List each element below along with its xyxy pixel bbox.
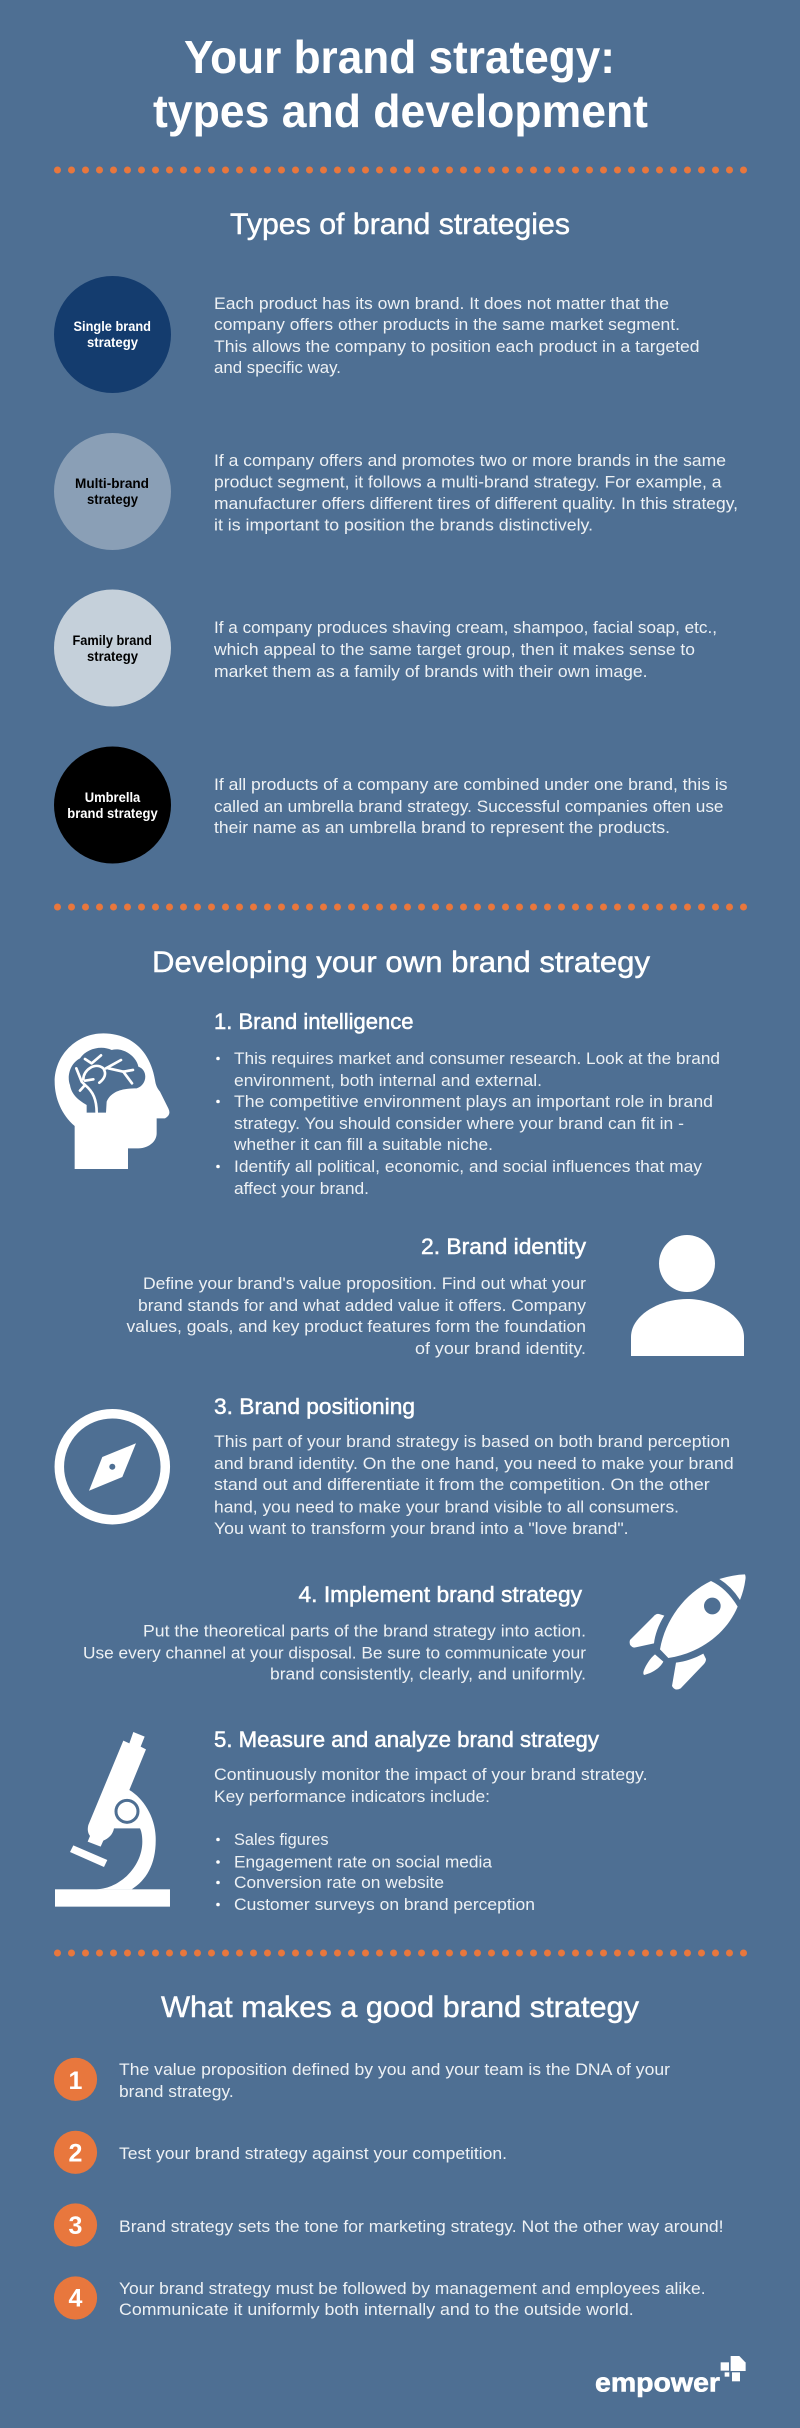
logo: empower xyxy=(595,2356,746,2398)
text: brand positioning description: stand out and differentiate it from the competition. On the other xyxy=(214,1475,710,1494)
panel: step 2 brand identity xyxy=(126,1234,744,1358)
list: brand intelligence points: strategy. You should consider where your brand can fit in - xyxy=(234,1114,684,1133)
badge: umbrella brand strategy: Umbrella xyxy=(85,790,141,805)
text: brand identity description xyxy=(126,1274,587,1358)
text: brand positioning description: and brand identity. On the one hand, you need to make your brand xyxy=(214,1454,734,1473)
number badge 2 xyxy=(54,2131,97,2174)
text: item 1: The value proposition defined by you and your team is the DNA of your xyxy=(119,2060,670,2079)
list: brand intelligence points: The competitive environment plays an important role in brand xyxy=(234,1092,713,1111)
text: umbrella brand description xyxy=(214,775,728,837)
icon: microscope xyxy=(55,1732,170,1907)
text: item 1 xyxy=(119,2060,670,2101)
list: brand intelligence points: whether it can fill a suitable niche. xyxy=(233,1135,493,1154)
heading: 4. implement brand strategy: 4. Implement brand strategy xyxy=(298,1582,582,1607)
item 1 xyxy=(54,2058,670,2101)
text: brand positioning description xyxy=(214,1432,734,1538)
text: brand positioning description: You want to transform your brand into a "love brand". xyxy=(214,1519,629,1538)
title: types and development xyxy=(153,85,648,137)
text: brand positioning description: This part of your brand strategy is based on both brand perception xyxy=(214,1432,730,1451)
text: implement description xyxy=(83,1621,586,1683)
badge: family brand strategy: Family brand xyxy=(72,633,152,648)
number badge 1: 1 xyxy=(69,2067,83,2095)
badge: single brand strategy: strategy xyxy=(87,335,138,350)
text: multi-brand description: product segment, it follows a multi-brand strategy. For example, a xyxy=(214,472,722,492)
text: measure intro: Key performance indicators include: xyxy=(214,1787,490,1806)
text: item 1: brand strategy. xyxy=(119,2082,234,2101)
list: brand intelligence points: Identify all political, economic, and social influences that may xyxy=(234,1157,703,1176)
text: implement description: Use every channel at your disposal. Be sure to communicate your xyxy=(83,1644,586,1663)
list: key performance indicators: Sales figures xyxy=(234,1830,329,1849)
text: family brand description xyxy=(213,618,717,681)
text: item 4: Your brand strategy must be followed by management and employees alike. xyxy=(119,2279,706,2298)
number badge 1 xyxy=(54,2058,97,2101)
text: measure intro xyxy=(214,1765,648,1806)
panel: step 1 brand intelligence xyxy=(55,1009,720,1198)
panel: step 4 implement brand strategy xyxy=(83,1574,746,1690)
text: multi-brand description: manufacturer offers different tires of different quality. In this strategy, xyxy=(214,494,738,513)
badge: umbrella brand strategy xyxy=(54,746,171,864)
item 3 xyxy=(54,2203,724,2247)
item 2 xyxy=(54,2131,507,2174)
list: brand intelligence points xyxy=(216,1049,720,1198)
badge: multi-brand strategy: strategy xyxy=(87,492,138,507)
text: single brand description xyxy=(214,294,700,377)
text: item 4 xyxy=(119,2279,706,2319)
heading: 2. brand identity: 2. Brand identity xyxy=(421,1234,586,1259)
badge: single brand strategy: Single brand xyxy=(74,319,151,334)
panel: step 3 brand positioning xyxy=(59,1394,734,1538)
list: brand intelligence points: environment, both internal and external. xyxy=(234,1071,542,1090)
text: family brand description: market them as a family of brands with their own image. xyxy=(214,662,648,681)
heading: 3. brand positioning: 3. Brand positioning xyxy=(214,1394,415,1419)
list: brand intelligence points: affect your brand. xyxy=(234,1179,369,1198)
text: family brand description: If a company produces shaving cream, shampoo, facial soap, etc., xyxy=(214,618,717,637)
number badge 2: 2 xyxy=(69,2140,82,2168)
text: item 4: Communicate it uniformly both internally and to the outside world. xyxy=(119,2300,634,2319)
heading: developing your own brand strategy: Developing your own brand strategy xyxy=(152,946,650,979)
title: Your brand strategy: xyxy=(184,31,615,83)
text: multi-brand description: it is important to position the brands distinctively. xyxy=(214,516,593,534)
heading: 5. measure and analyze brand strategy: 5. Measure and analyze brand strategy xyxy=(214,1727,599,1752)
list: key performance indicators xyxy=(216,1830,535,1914)
panel: step 5 measure and analyze xyxy=(55,1727,648,1914)
heading: 1. brand intelligence: 1. Brand intelligence xyxy=(214,1009,414,1034)
panel: family brand strategy xyxy=(54,590,717,706)
badge: family brand strategy xyxy=(54,590,171,706)
text: brand identity description: brand stands for and what added value it offers. Company xyxy=(138,1296,587,1315)
icon: head with brain xyxy=(55,1033,169,1169)
text: measure intro: Continuously monitor the impact of your brand strategy. xyxy=(214,1765,648,1784)
number badge 3 xyxy=(54,2203,97,2247)
text: family brand description: which appeal to the same target group, then it makes sense to xyxy=(213,640,695,659)
text: umbrella brand description: If all products of a company are combined under one brand, this is xyxy=(214,775,728,794)
badge: umbrella brand strategy: brand strategy xyxy=(67,806,158,821)
text: multi-brand description xyxy=(214,451,738,534)
heading: types of brand strategies: Types of brand strategies xyxy=(230,208,570,241)
text: single brand description: This allows the company to position each product in a targeted xyxy=(214,337,700,356)
text: multi-brand description: If a company offers and promotes two or more brands in the same xyxy=(214,451,726,470)
list: key performance indicators: Customer surveys on brand perception xyxy=(234,1895,535,1914)
text: implement description: brand consistently, clearly, and uniformly. xyxy=(270,1664,586,1683)
text: brand identity description: values, goals, and key product features form the foundation xyxy=(126,1317,586,1336)
panel: multi-brand strategy xyxy=(54,433,738,550)
list: brand intelligence points: This requires market and consumer research. Look at the brand xyxy=(234,1049,720,1068)
heading: what makes a good brand strategy: What makes a good brand strategy xyxy=(161,1991,639,2024)
number badge 4: 4 xyxy=(69,2285,83,2313)
list: key performance indicators: Conversion rate on website xyxy=(234,1873,444,1892)
text: brand identity description: Define your brand's value proposition. Find out what your xyxy=(143,1274,586,1293)
number badge 3: 3 xyxy=(69,2212,82,2240)
list: key performance indicators: Engagement rate on social media xyxy=(234,1852,493,1872)
panel: single brand strategy xyxy=(54,276,700,393)
badge: multi-brand strategy xyxy=(54,433,171,550)
text: umbrella brand description: called an umbrella brand strategy. Successful companies often use xyxy=(214,797,724,816)
text: single brand description: company offers other products in the same market segment. xyxy=(214,315,680,334)
text: item 3: Brand strategy sets the tone for marketing strategy. Not the other way around! xyxy=(119,2217,724,2236)
icon: rocket xyxy=(630,1574,746,1690)
text: single brand description: and specific way. xyxy=(214,358,341,377)
text: umbrella brand description: their name as an umbrella brand to represent the products. xyxy=(214,818,670,837)
badge: family brand strategy: strategy xyxy=(87,649,138,664)
badge: single brand strategy xyxy=(54,276,171,393)
text: single brand description: Each product has its own brand. It does not matter that the xyxy=(214,294,669,313)
text: brand identity description: of your brand identity. xyxy=(415,1339,586,1358)
number badge 4 xyxy=(54,2276,97,2320)
badge: multi-brand strategy: Multi-brand xyxy=(75,476,149,491)
title xyxy=(153,31,648,137)
text: implement description: Put the theoretical parts of the brand strategy into action. xyxy=(143,1621,586,1640)
icon: person xyxy=(631,1235,744,1356)
item 4 xyxy=(54,2276,706,2320)
logo: empower: empower xyxy=(595,2368,721,2398)
icon: compass xyxy=(59,1414,165,1520)
text: item 2: Test your brand strategy against your competition. xyxy=(119,2144,507,2163)
text: brand positioning description: hand, you need to make your brand visible to all consumers. xyxy=(214,1498,679,1516)
panel: umbrella brand strategy xyxy=(54,746,728,864)
